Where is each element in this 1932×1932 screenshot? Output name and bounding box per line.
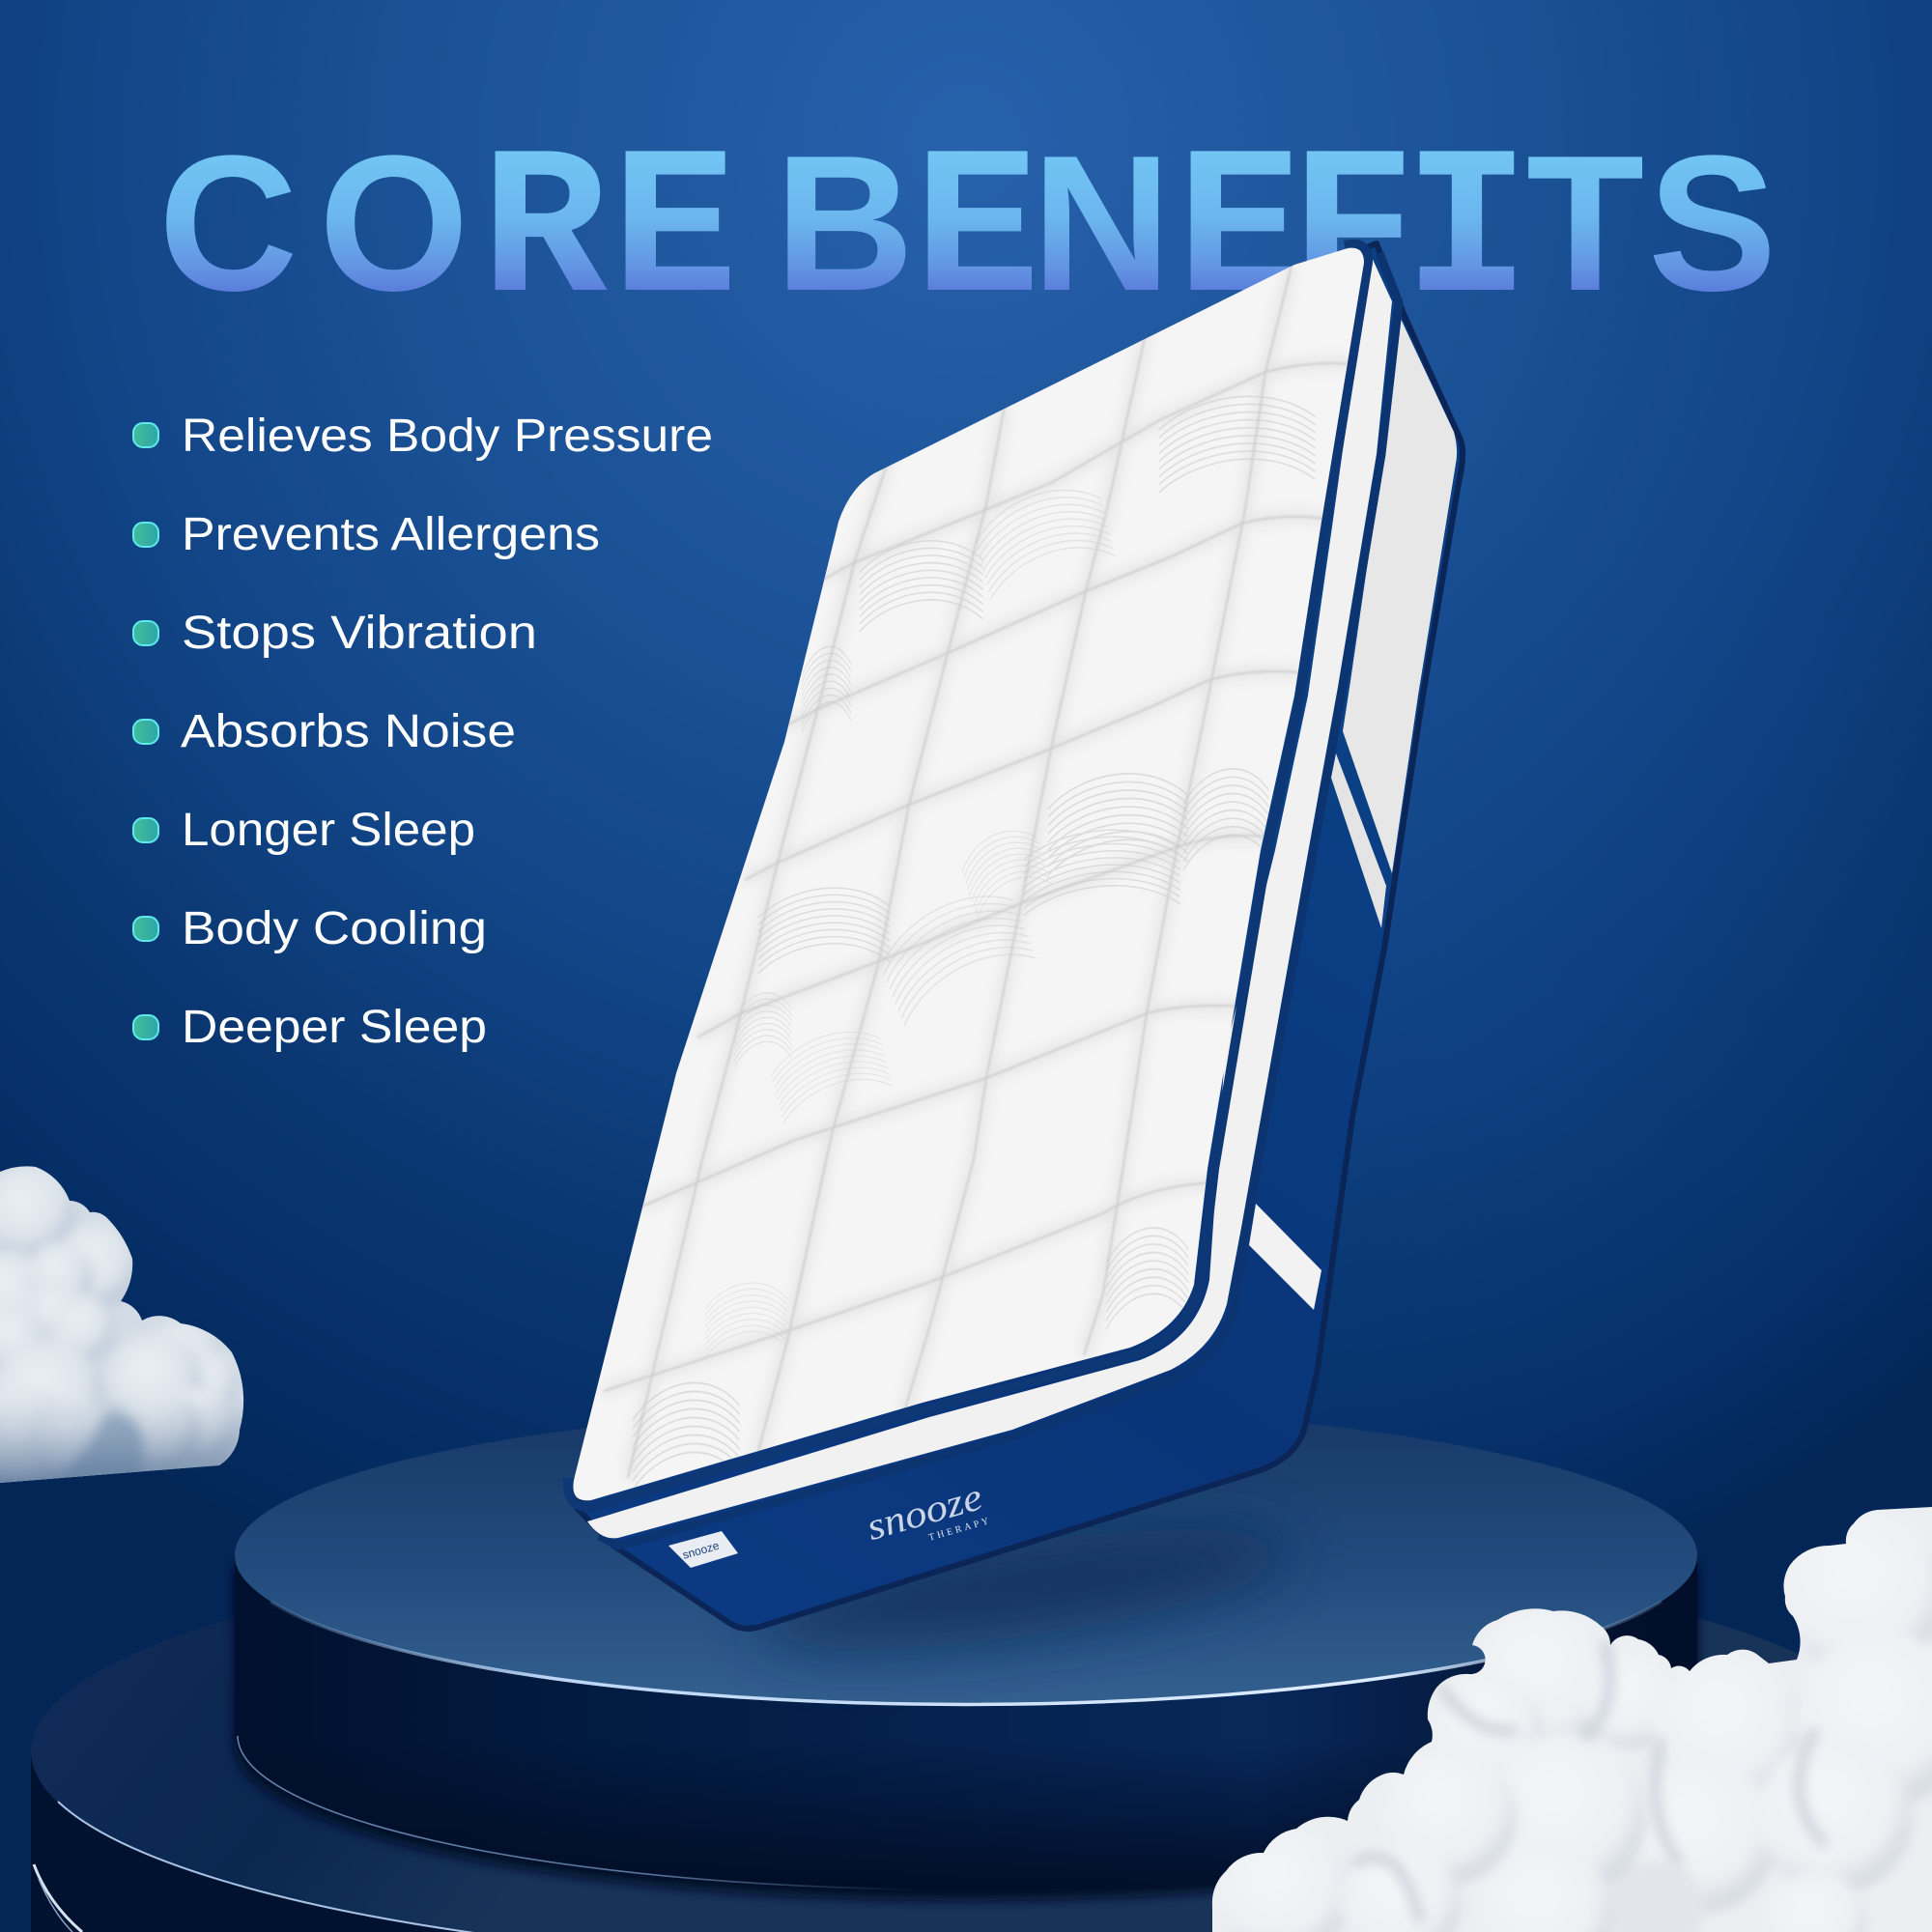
item: body cooling: Body Cooling [182,903,487,954]
title: N [1032,116,1171,331]
quilted top face [541,222,1391,1517]
item: relieves body pressure: Relieves Body Pressure [182,411,713,462]
mattress blue base and side [578,243,1463,1629]
quilt seam shading [604,266,1362,1478]
lower podium disc [31,1537,1901,1932]
title: RE [481,116,738,354]
title: EFI [1177,116,1530,354]
title: E [914,116,1040,354]
wave texture patches [633,396,1316,1490]
quilt seam lines [604,266,1362,1478]
upper podium disc [235,1406,1697,1900]
brand logo: THERAPY [927,1516,993,1544]
item: absorbs noise: Absorbs Noise [181,706,516,757]
side care label [1249,1204,1321,1310]
title: B [775,116,914,331]
white band between pipings [587,253,1392,1538]
item: stops vibration: Stops Vibration [182,608,537,659]
cloud: bottom right [1198,1497,1932,1932]
title: TS [1526,116,1776,331]
side white panel [1343,319,1457,873]
item: longer sleep: Longer Sleep [182,805,475,856]
top piping [568,244,1368,1507]
brand logo: snooze [862,1474,987,1548]
side second piping [599,253,1399,1546]
mattress [541,222,1463,1629]
cloud: left [0,1166,243,1483]
item: prevents allergens: Prevents Allergens [182,509,600,560]
title: CO [158,116,469,331]
mattress shadow on podium [750,1505,1298,1673]
side white strip [1331,753,1386,928]
front tag [668,1531,738,1568]
benefits list [133,411,713,1053]
front tag: snooze [681,1539,721,1562]
item: deeper sleep: Deeper Sleep [182,1002,487,1053]
